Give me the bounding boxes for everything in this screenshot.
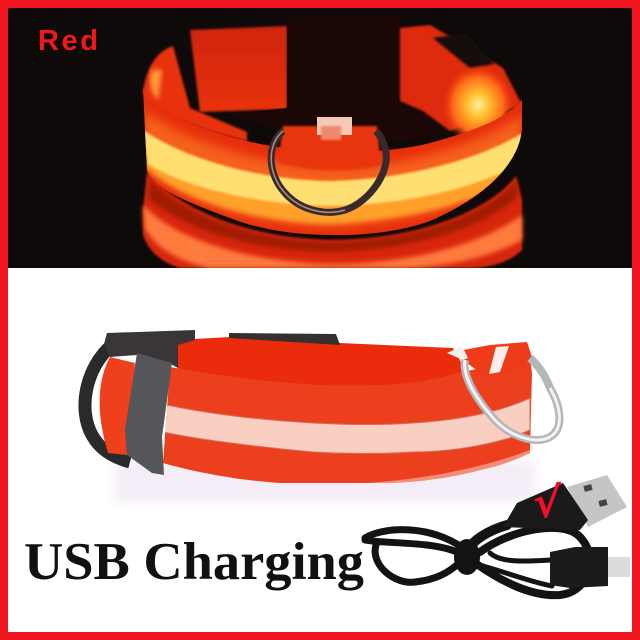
D-ring xyxy=(271,131,386,212)
strap tab xyxy=(447,342,532,378)
reflection of the collar xyxy=(143,172,522,268)
soft shadow backdrop xyxy=(115,462,535,502)
back buckle bar xyxy=(229,333,340,345)
buckle xyxy=(230,15,450,142)
loop tag xyxy=(317,117,352,135)
micro USB plug xyxy=(550,547,608,588)
icon: metal D-ring xyxy=(465,358,559,440)
right strap xyxy=(400,25,522,145)
collar glowing band xyxy=(143,88,522,236)
cable knot xyxy=(454,539,480,575)
USB plug body xyxy=(503,483,588,530)
label: Red: Red xyxy=(38,25,101,57)
USB connector holes xyxy=(583,484,593,492)
USB metal connector xyxy=(567,475,627,527)
panel: glowing collar photo xyxy=(8,8,632,268)
collar back strap xyxy=(177,337,470,392)
cable loops xyxy=(365,525,590,595)
glow: lower amber xyxy=(146,140,522,224)
icon: plastic buckle xyxy=(85,330,195,475)
micro USB metal xyxy=(608,557,630,577)
icon: USB cable xyxy=(365,475,630,595)
heading: USB Charging: USB Charging xyxy=(24,533,364,591)
strap flap under D-ring xyxy=(278,126,381,170)
glow: upper orange xyxy=(143,110,522,226)
left inner flap xyxy=(143,46,247,141)
panel: white product photo collar xyxy=(85,330,559,502)
check mark: √ xyxy=(533,478,562,527)
collar band xyxy=(163,362,532,483)
collar back strap left xyxy=(190,26,287,112)
glow: yellow stripe xyxy=(143,130,522,206)
